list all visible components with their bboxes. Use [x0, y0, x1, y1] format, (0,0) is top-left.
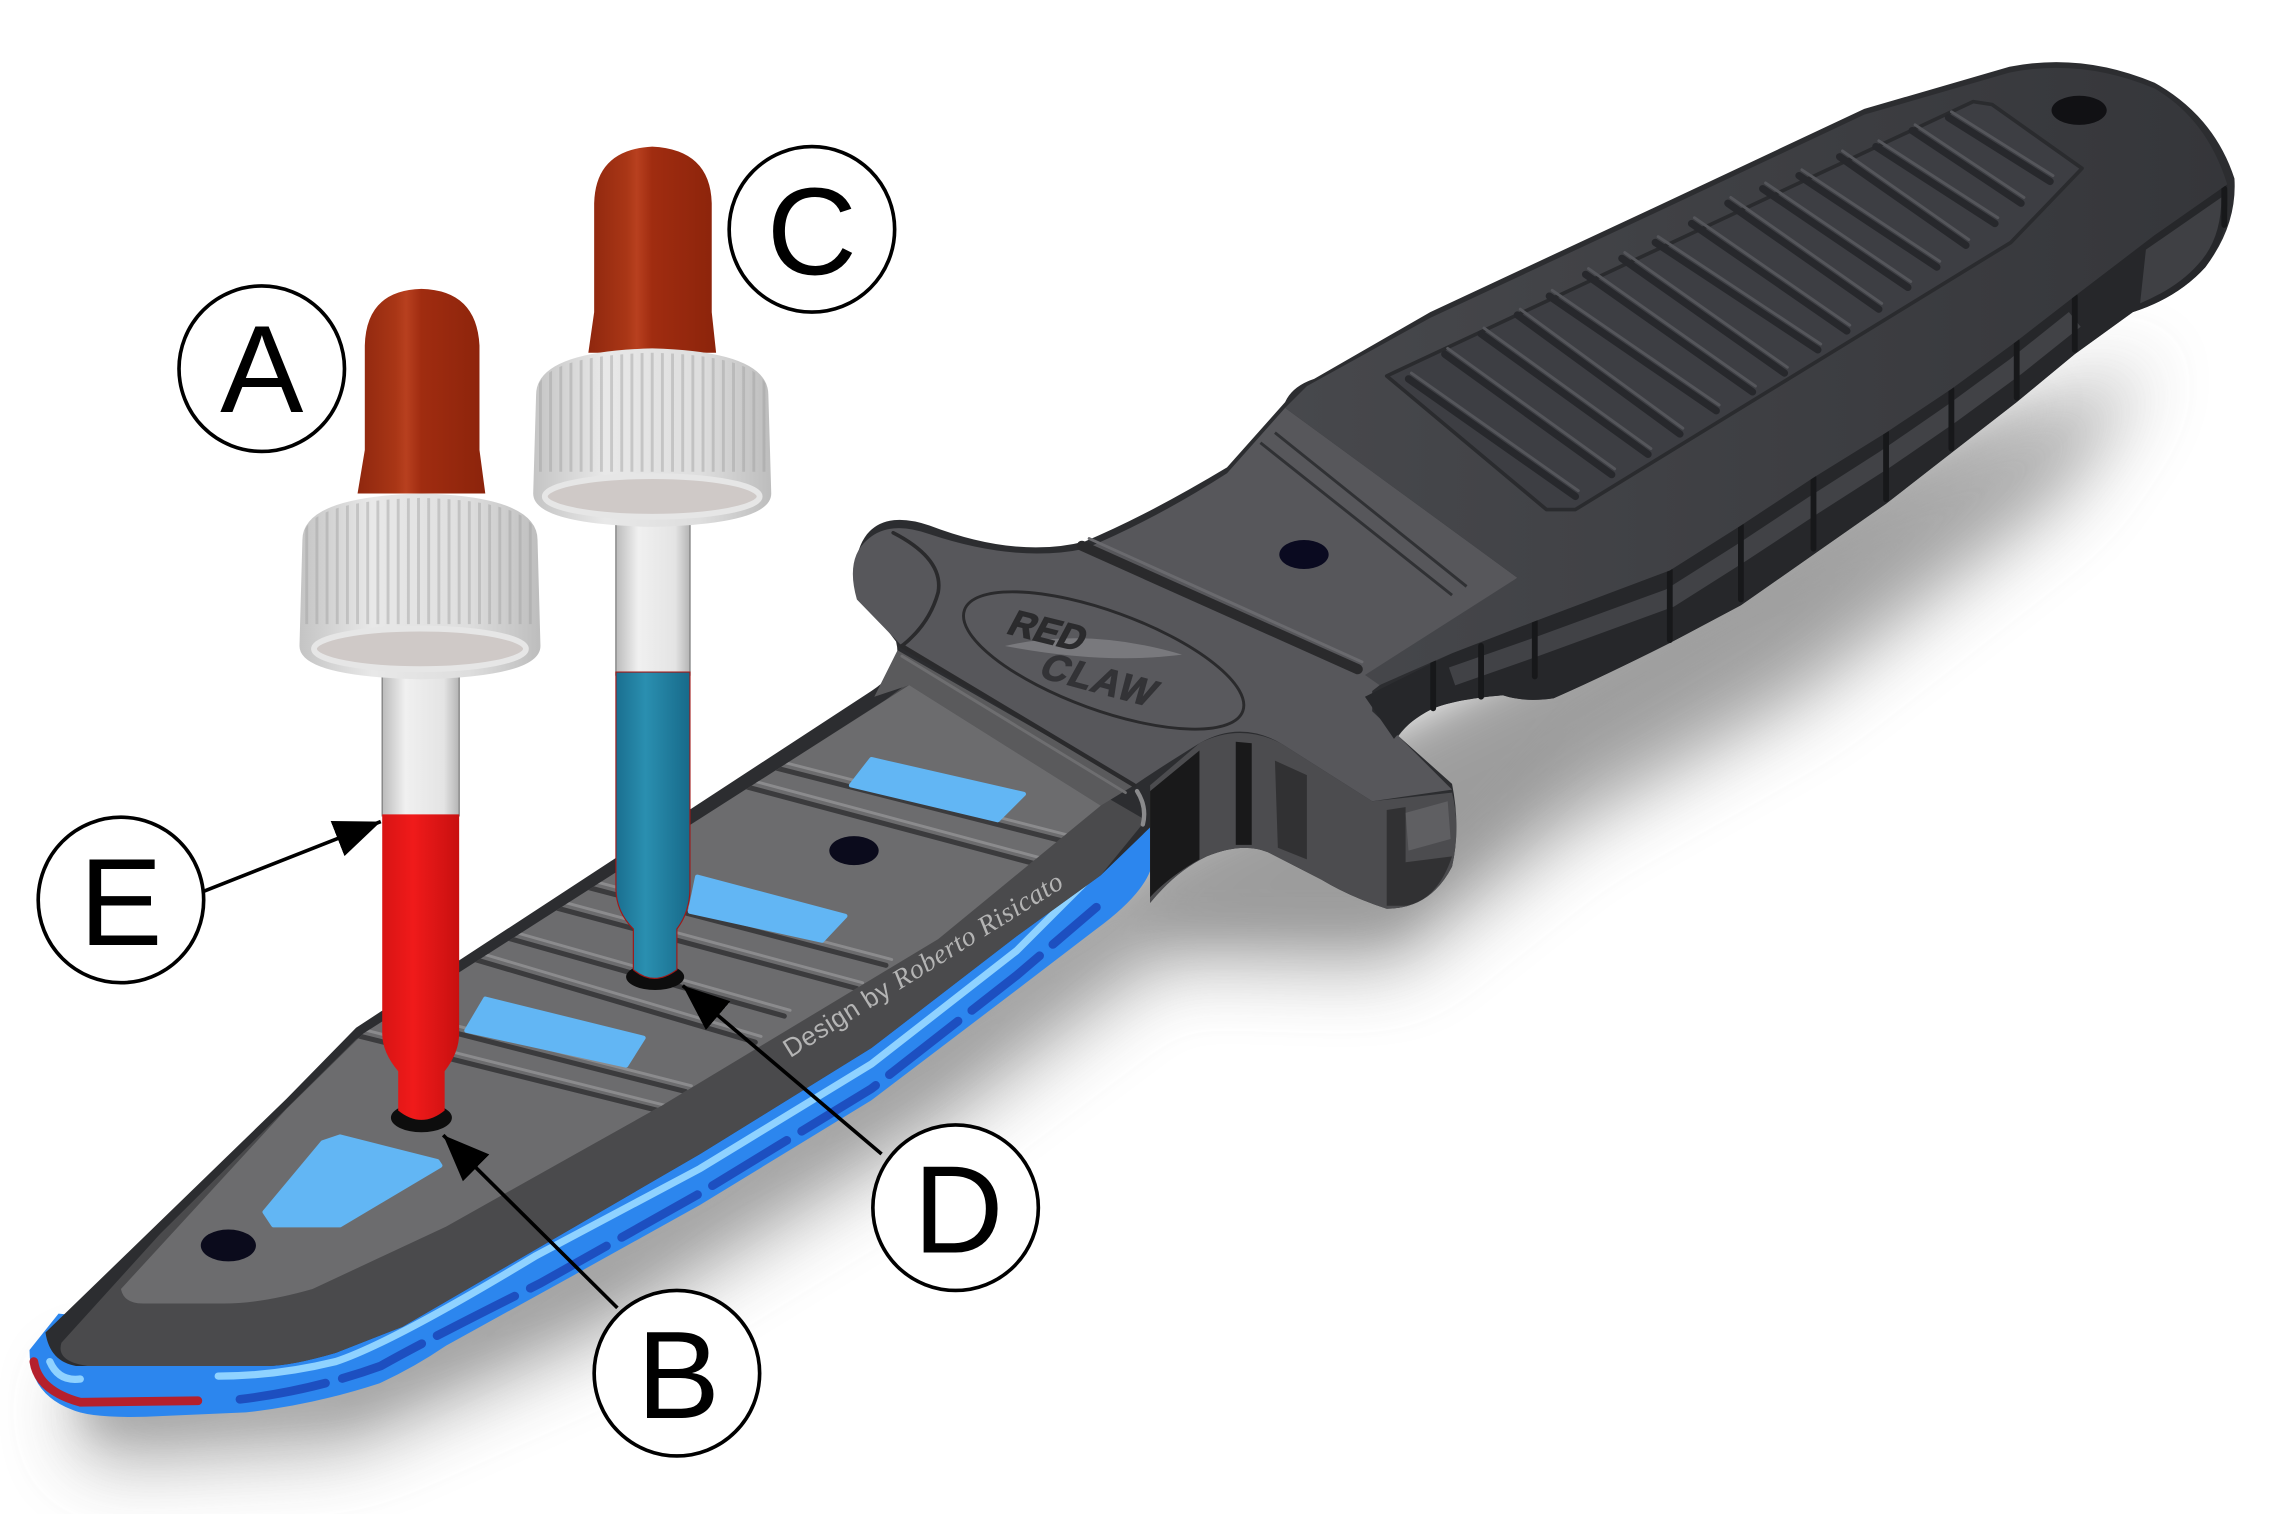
red tip strip	[34, 1362, 198, 1402]
blade shoulder	[874, 650, 1134, 806]
arrow: D to hole	[683, 986, 882, 1154]
label B	[594, 1290, 760, 1456]
red liquid	[382, 814, 459, 1120]
handle mid band	[1452, 319, 2075, 676]
hole for dropper A	[391, 1103, 452, 1132]
dark blue serrated strip	[240, 907, 1096, 1399]
mounting holes	[201, 96, 2107, 1261]
guard groove lines	[893, 533, 1362, 824]
blue blade edge	[29, 798, 1154, 1417]
label C	[729, 147, 895, 312]
glass tube A	[382, 668, 459, 816]
cap A knurling	[301, 498, 539, 624]
hole for dropper C	[626, 964, 684, 990]
cap C knurling	[535, 353, 770, 472]
label A: A	[220, 300, 304, 439]
label A	[179, 286, 344, 451]
inlay 3	[690, 877, 845, 941]
dropper C	[533, 147, 771, 990]
designer signature: Design by Roberto Risicato	[777, 865, 1069, 1063]
blade top panel	[121, 685, 1101, 1304]
label D: D	[913, 1141, 1004, 1280]
Red Claw emblem	[948, 563, 1260, 757]
inlay 4	[851, 759, 1024, 820]
logo blade swoosh	[1005, 638, 1182, 658]
bulb A	[358, 289, 485, 494]
cap C inner rim	[545, 476, 760, 517]
inlay 2	[466, 999, 644, 1065]
cap C	[533, 348, 771, 527]
bulb C	[588, 147, 716, 353]
CLAW logotype: CLAW	[1032, 646, 1167, 715]
blade grooves	[349, 761, 1083, 1115]
cap A	[299, 494, 540, 679]
blue inlay stripes	[265, 759, 1024, 1225]
arrow: E to liquid level	[204, 822, 381, 891]
dark shade bands	[1150, 742, 1252, 897]
lower guard prong side	[1150, 733, 1456, 909]
label D	[873, 1125, 1038, 1290]
dropper A	[299, 289, 540, 1132]
handle collar lines	[1260, 433, 1467, 595]
cap A inner rim	[314, 629, 526, 669]
grip ribs	[1408, 112, 2053, 496]
RED logotype: RED	[1001, 603, 1095, 659]
prong end highlight	[1406, 801, 1451, 851]
label B: B	[637, 1306, 720, 1445]
blade bevel	[61, 682, 1146, 1366]
grip panel	[1387, 102, 2082, 510]
label E	[38, 817, 204, 983]
label C: C	[767, 162, 857, 301]
arrow: B to hole	[443, 1135, 617, 1308]
handle side	[1365, 184, 2228, 739]
label E: E	[79, 833, 163, 972]
grip ridges	[1433, 189, 2224, 708]
blue liquid	[616, 672, 690, 978]
butt highlight	[2140, 197, 2221, 303]
guard top surface	[853, 408, 1517, 801]
handle top surface	[1285, 68, 2227, 685]
drop shadow under knife	[73, 363, 2149, 1459]
edge highlight	[50, 856, 1111, 1379]
glass tube C	[616, 515, 690, 675]
tip inlay	[265, 1137, 440, 1225]
